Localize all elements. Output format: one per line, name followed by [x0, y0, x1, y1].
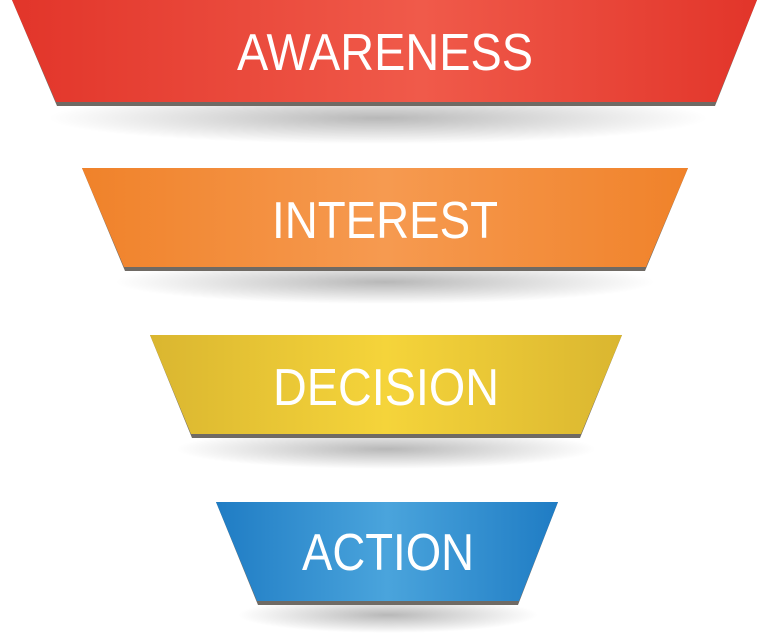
- stage: decision: DECISION: [273, 359, 499, 417]
- stage: awareness: AWARENESS: [237, 24, 533, 82]
- stage: awareness: [12, 0, 757, 106]
- shadows: [48, 92, 708, 633]
- stage: interest: [82, 168, 688, 271]
- stage: interest: INTEREST: [272, 192, 498, 250]
- stage: decision: [150, 335, 622, 438]
- stage: action: [216, 502, 558, 605]
- stage: action: ACTION: [302, 524, 474, 582]
